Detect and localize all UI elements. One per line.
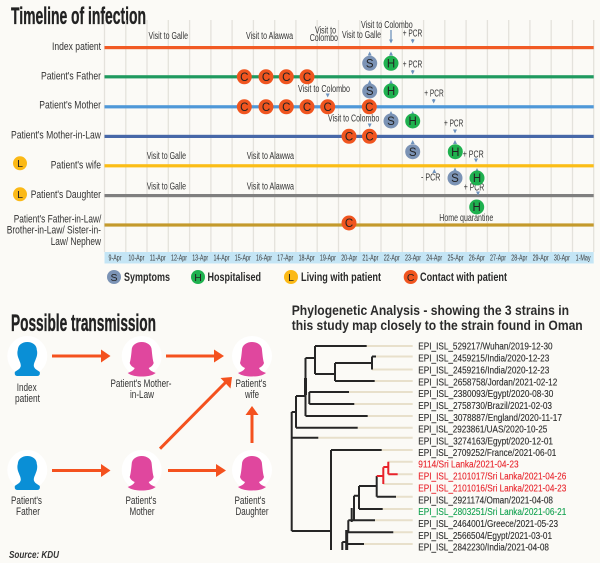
- visit annotations: Visit to Galle: [147, 182, 186, 193]
- symptom markers: S: [451, 173, 459, 185]
- strain labels: EPI_ISL_2921174/Oman/2021-04-08: [418, 494, 553, 506]
- row labels: Patient's Father-in-Law/: [14, 214, 102, 226]
- visit annotations: Visit to: [315, 26, 336, 37]
- person labels: Daughter: [236, 506, 269, 518]
- date axis: 23-Apr: [405, 254, 421, 263]
- date axis: 26-Apr: [469, 254, 485, 263]
- hospitalised markers: H: [409, 116, 417, 128]
- row labels: [7, 41, 102, 248]
- contact markers: C: [282, 72, 290, 84]
- row labels: Patient's Father: [41, 70, 101, 82]
- contact markers: C: [282, 102, 290, 114]
- icon: patient's daughter: [232, 450, 272, 490]
- hospitalised markers: H: [451, 147, 459, 159]
- row labels: Patient's Mother: [39, 100, 101, 112]
- hospitalised markers: H: [473, 173, 481, 185]
- visit annotations: Home quarantine: [439, 213, 494, 224]
- date axis: 19-Apr: [320, 254, 336, 263]
- tree tips: [318, 346, 413, 544]
- person labels: Patient's: [234, 495, 266, 507]
- PCR labels: + PCR: [403, 29, 422, 40]
- visit annotations: Visit to Alawwa: [246, 31, 293, 42]
- date axis: 10-Apr: [128, 254, 145, 263]
- date axis: 16-Apr: [256, 254, 272, 263]
- person labels: Patient's: [126, 495, 157, 507]
- panel: possible transmission: [7, 310, 272, 561]
- symptom markers: S: [366, 86, 374, 98]
- PCR labels: + PCR: [403, 59, 422, 70]
- contact markers: C: [365, 131, 374, 143]
- visit annotations: Visit to Colombo: [361, 20, 413, 31]
- date axis: 24-Apr: [426, 254, 442, 263]
- source: Source: KDU: [9, 549, 59, 561]
- strain labels: EPI_ISL_3078887/England/2020-11-17: [418, 412, 562, 424]
- strain labels: EPI_ISL_2842230/India/2021-04-08: [418, 542, 549, 554]
- contact markers: C: [365, 102, 373, 114]
- legend: S: [110, 272, 118, 284]
- contact markers: C: [262, 72, 270, 84]
- date axis: 15-Apr: [235, 254, 251, 263]
- icon: patient's father: [7, 450, 47, 490]
- strain labels: EPI_ISL_2566504/Egypt/2021-03-01: [418, 530, 552, 542]
- transmission arrows: [52, 350, 258, 477]
- contact markers: C: [240, 102, 248, 114]
- visit annotations: Visit to Galle: [342, 30, 381, 41]
- date axis: [104, 252, 594, 264]
- tree branches: [292, 346, 396, 550]
- visit annotations: Visit to Galle: [148, 31, 188, 42]
- visit annotations: Visit to Colombo: [328, 113, 380, 124]
- PCR labels: [403, 29, 484, 194]
- strain labels: EPI_ISL_2709252/France/2021-06-01: [418, 447, 556, 459]
- person labels: in-Law: [130, 389, 154, 401]
- date axis: 27-Apr: [490, 254, 506, 263]
- title: timeline of infection: Timeline of infection: [11, 3, 146, 30]
- visit annotations: Visit to Alawwa: [247, 151, 294, 162]
- contact markers: C: [345, 218, 353, 230]
- row labels: Index patient: [52, 41, 101, 53]
- legend: [107, 270, 507, 284]
- row labels: Patient's Daughter: [31, 189, 101, 201]
- legend: L: [288, 272, 294, 284]
- hospitalised markers: [384, 56, 484, 214]
- visit annotations: Visit to Galle: [147, 151, 186, 162]
- symptom markers: [362, 56, 462, 185]
- date axis: 28-Apr: [511, 254, 528, 263]
- hospitalised markers: H: [387, 58, 395, 70]
- strain labels: EPI_ISL_2758730/Brazil/2021-02-03: [418, 400, 552, 412]
- date axis: 13-Apr: [192, 254, 208, 263]
- contact markers: C: [303, 72, 311, 84]
- legend: Hospitalised: [208, 270, 261, 284]
- PCR labels: - PCR: [421, 173, 440, 184]
- date axis: 18-Apr: [299, 254, 315, 263]
- date axis: 14-Apr: [214, 254, 230, 263]
- strain labels: [418, 341, 566, 554]
- living with patient markers: L: [17, 158, 23, 170]
- icon: patient's wife: [232, 336, 272, 376]
- date axis: 29-Apr: [533, 254, 549, 263]
- person labels: Patient's: [11, 495, 42, 507]
- icon: patient's mother: [122, 450, 162, 490]
- phylogenetic heading: [292, 302, 583, 333]
- row labels: Patient's Mother-in-Law: [11, 129, 101, 141]
- visit annotations: Visit to Alawwa: [247, 182, 294, 193]
- strain labels: EPI_ISL_2459215/India/2020-12-23: [418, 352, 549, 364]
- hospitalised markers: H: [387, 86, 395, 98]
- panel: timeline of infection: [7, 3, 594, 284]
- living with patient markers: L: [17, 189, 23, 201]
- hospitalised markers: H: [473, 202, 481, 214]
- person labels: Index: [17, 382, 37, 394]
- strain labels: EPI_ISL_2464001/Greece/2021-05-23: [418, 518, 558, 530]
- contact markers: C: [324, 102, 332, 114]
- highlighted Sri Lanka branches: [377, 462, 398, 484]
- contact markers: C: [303, 102, 311, 114]
- date axis: 11-Apr: [150, 254, 166, 263]
- icon: index patient: [7, 336, 47, 376]
- legend: Contact with patient: [420, 270, 507, 284]
- person labels: Patient's: [236, 378, 267, 390]
- strain labels: EPI_ISL_2658758/Jordan/2021-02-12: [418, 376, 557, 388]
- strain labels: EPI_ISL_2380093/Egypt/2020-08-30: [418, 388, 553, 400]
- PCR labels: + PCR: [463, 149, 484, 160]
- date axis: 20-Apr: [341, 254, 357, 263]
- date axis: 25-Apr: [448, 254, 464, 263]
- small arrows: [328, 30, 478, 194]
- date axis: 12-Apr: [171, 254, 187, 263]
- strain labels: EPI_ISL_2459216/India/2020-12-23: [418, 364, 549, 376]
- contact markers: C: [262, 102, 270, 114]
- row labels: Law/ Nephew: [51, 236, 101, 248]
- visit annotations: [147, 20, 494, 224]
- symptom markers: S: [366, 58, 374, 70]
- visit annotations: Colombo: [310, 33, 338, 44]
- row labels: Brother-in-Law/ Sister-in-: [7, 225, 101, 237]
- symptom markers: S: [409, 147, 417, 159]
- person labels: wife: [244, 389, 259, 401]
- PCR labels: + PCR: [444, 119, 463, 130]
- strain labels: EPI_ISL_529217/Wuhan/2019-12-30: [418, 341, 553, 353]
- row labels: Patient's wife: [51, 159, 101, 171]
- PCR labels: + PCR: [424, 89, 444, 100]
- legend: H: [194, 272, 202, 284]
- living with patient markers: [13, 156, 27, 201]
- contact markers: C: [345, 131, 353, 143]
- legend: Living with patient: [301, 270, 381, 284]
- person labels: [11, 378, 269, 518]
- visit annotations: Visit to Colombo: [298, 84, 350, 95]
- PCR labels: + PCR: [464, 183, 484, 194]
- date axis: 1-May: [576, 254, 591, 263]
- strain labels: EPI_ISL_2923861/UAS/2020-10-25: [418, 424, 547, 436]
- strain labels: 9114/Sri Lanka/2021-04-23: [418, 458, 519, 470]
- person labels: Patient's Mother-: [110, 378, 172, 390]
- legend: Symptoms: [124, 270, 170, 284]
- person labels: Mother: [130, 506, 155, 518]
- date axis: 30-Apr: [554, 254, 570, 263]
- contact markers: [237, 69, 377, 230]
- person labels: Father: [16, 506, 40, 518]
- person labels: patient: [15, 393, 40, 405]
- date axis: 22-Apr: [384, 254, 400, 263]
- patient timelines: [104, 46, 594, 227]
- strain labels: EPI_ISL_3274163/Egypt/2020-12-01: [418, 435, 553, 447]
- panel: phylogenetic analysis: [292, 302, 583, 554]
- contact markers: C: [240, 72, 248, 84]
- legend: C: [407, 272, 415, 284]
- date axis: 9-Apr: [108, 254, 122, 263]
- symptom markers: S: [387, 116, 395, 128]
- date axis: 21-Apr: [362, 254, 379, 263]
- date axis: 17-Apr: [277, 254, 294, 263]
- heading: possible transmission: Possible transmission: [11, 310, 156, 337]
- icon: patient's mother-in-law: [122, 336, 162, 376]
